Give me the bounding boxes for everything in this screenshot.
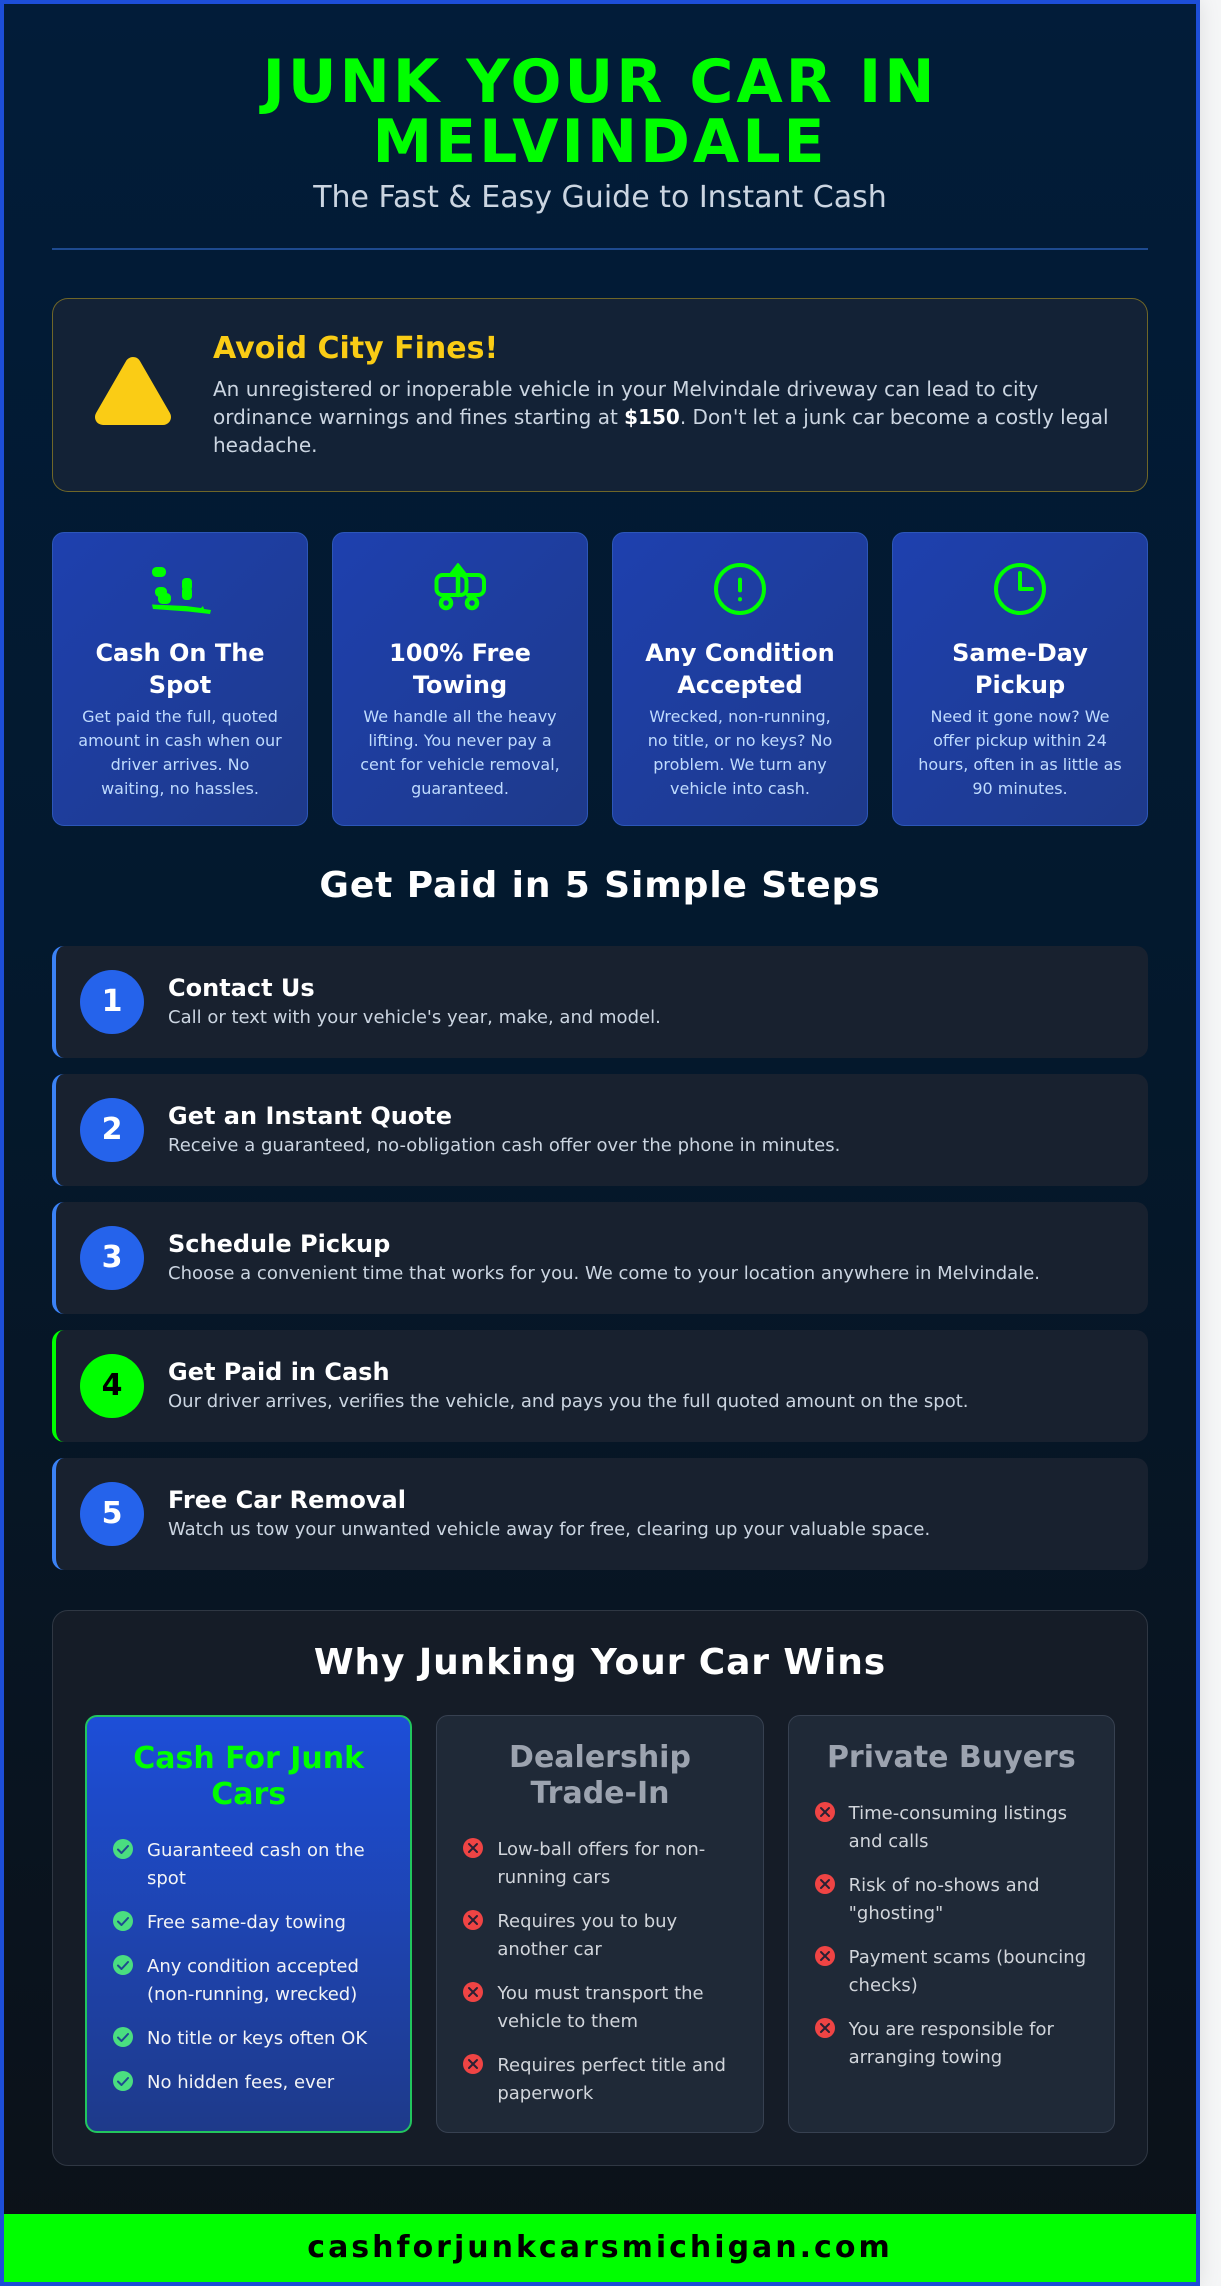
panel: comparison (52, 1610, 1148, 2166)
card: free towing (332, 532, 588, 826)
alert text (213, 331, 1109, 457)
card description: We handle all the heavy lifting. You never pay a cent for vehicle removal, guaranteed. (360, 707, 560, 798)
item: You are responsible for arranging towing (849, 2019, 1054, 2068)
step number: 3 (102, 1240, 122, 1275)
heading: comparison: Why Junking Your Car Wins (314, 1642, 886, 1683)
step text: Get Paid in Cash (168, 1358, 390, 1386)
step text (168, 1358, 969, 1412)
card description: Get paid the full, quoted amount in cash when our driver arrives. No waiting, no hassles. (78, 707, 282, 798)
item: Any condition accepted (non-running, wrecked) (147, 1956, 359, 2005)
panel: city fines alert (52, 298, 1148, 492)
item: Time-consuming listings and calls (849, 1803, 1067, 1852)
card: cash on the spot (52, 532, 308, 826)
step number (80, 1098, 144, 1162)
step text: Choose a convenient time that works for you. We come to your location anywhere in Melvindale. (168, 1263, 1040, 1284)
icon: cash (152, 567, 211, 614)
step text: Receive a guaranteed, no-obligation cash offer over the phone in minutes. (168, 1135, 840, 1156)
card heading: Any Condition Accepted (645, 639, 835, 699)
panel: feature cards (52, 532, 1148, 826)
step text: Contact Us (168, 974, 315, 1002)
step text: Call or text with your vehicle's year, make, and model. (168, 1007, 661, 1028)
column: private buyers (788, 1715, 1115, 2133)
heading: steps: Get Paid in 5 Simple Steps (319, 865, 881, 906)
step number (80, 1482, 144, 1546)
item: Guaranteed cash on the spot (147, 1840, 365, 1889)
card heading: Cash On The Spot (95, 639, 265, 699)
step text: Free Car Removal (168, 1486, 406, 1514)
step number: 1 (102, 984, 122, 1019)
step number: 2 (102, 1112, 122, 1147)
alert body: An unregistered or inoperable vehicle in your Melvindale driveway can lead to city ordinance warnings and fines starting at $150. Don't let a junk car become a costly legal headache. (213, 377, 1109, 457)
step text (168, 1230, 1040, 1284)
step 1 (52, 946, 1148, 1058)
column heading: Dealership Trade-In (509, 1740, 691, 1811)
card heading: 100% Free Towing (389, 639, 531, 699)
icon: tow truck (434, 563, 486, 610)
step number (80, 1226, 144, 1290)
step 4 (52, 1330, 1148, 1442)
item: No hidden fees, ever (147, 2072, 334, 2093)
column: dealership trade-in (436, 1715, 764, 2133)
step 2 (52, 1074, 1148, 1186)
footer banner (4, 2214, 1196, 2282)
step text (168, 1486, 930, 1540)
step text: Get an Instant Quote (168, 1102, 452, 1130)
subtitle: The Fast & Easy Guide to Instant Cash (313, 180, 887, 215)
step 5 (52, 1458, 1148, 1570)
step number (80, 970, 144, 1034)
step 3 (52, 1202, 1148, 1314)
icon: clock (994, 563, 1046, 615)
step text: Schedule Pickup (168, 1230, 390, 1258)
icon: exclamation circle (714, 563, 766, 615)
card heading: Same-Day Pickup (952, 639, 1088, 699)
item: Low-ball offers for non-running cars (497, 1839, 705, 1888)
column heading: Cash For Junk Cars (133, 1741, 364, 1812)
step text: Our driver arrives, verifies the vehicle, and pays you the full quoted amount on the spot. (168, 1391, 969, 1412)
step text: Watch us tow your unwanted vehicle away for free, clearing up your valuable space. (168, 1519, 930, 1540)
item: No title or keys often OK (147, 2028, 367, 2049)
item: Risk of no-shows and "ghosting" (849, 1875, 1040, 1924)
comparison columns (85, 1715, 1115, 2133)
card description: Wrecked, non-running, no title, or no keys? No problem. We turn any vehicle into cash. (648, 707, 832, 798)
header (52, 52, 1148, 250)
item: Requires you to buy another car (497, 1911, 677, 1960)
item: Payment scams (bouncing checks) (849, 1947, 1086, 1996)
step number: 5 (102, 1496, 122, 1531)
item: You must transport the vehicle to them (497, 1983, 704, 2032)
step text (168, 974, 661, 1028)
step number (80, 1354, 144, 1418)
alert heading: Avoid City Fines! (213, 331, 498, 366)
card description: Need it gone now? We offer pickup within 24 hours, often in as little as 90 minutes. (918, 707, 1122, 798)
icon: warning triangle (95, 357, 171, 425)
panel: steps list (52, 946, 1148, 1570)
item: Requires perfect title and paperwork (497, 2055, 726, 2104)
step text (168, 1102, 840, 1156)
item: Free same-day towing (147, 1912, 346, 1933)
card: any condition (612, 532, 868, 826)
title: JUNK YOUR CAR IN MELVINDALE (263, 47, 937, 177)
column: cash for junk cars (85, 1715, 412, 2133)
footer banner: cashforjunkcarsmichigan.com (307, 2230, 893, 2265)
column heading: Private Buyers (827, 1740, 1076, 1775)
card: same-day pickup (892, 532, 1148, 826)
step number: 4 (102, 1368, 122, 1403)
